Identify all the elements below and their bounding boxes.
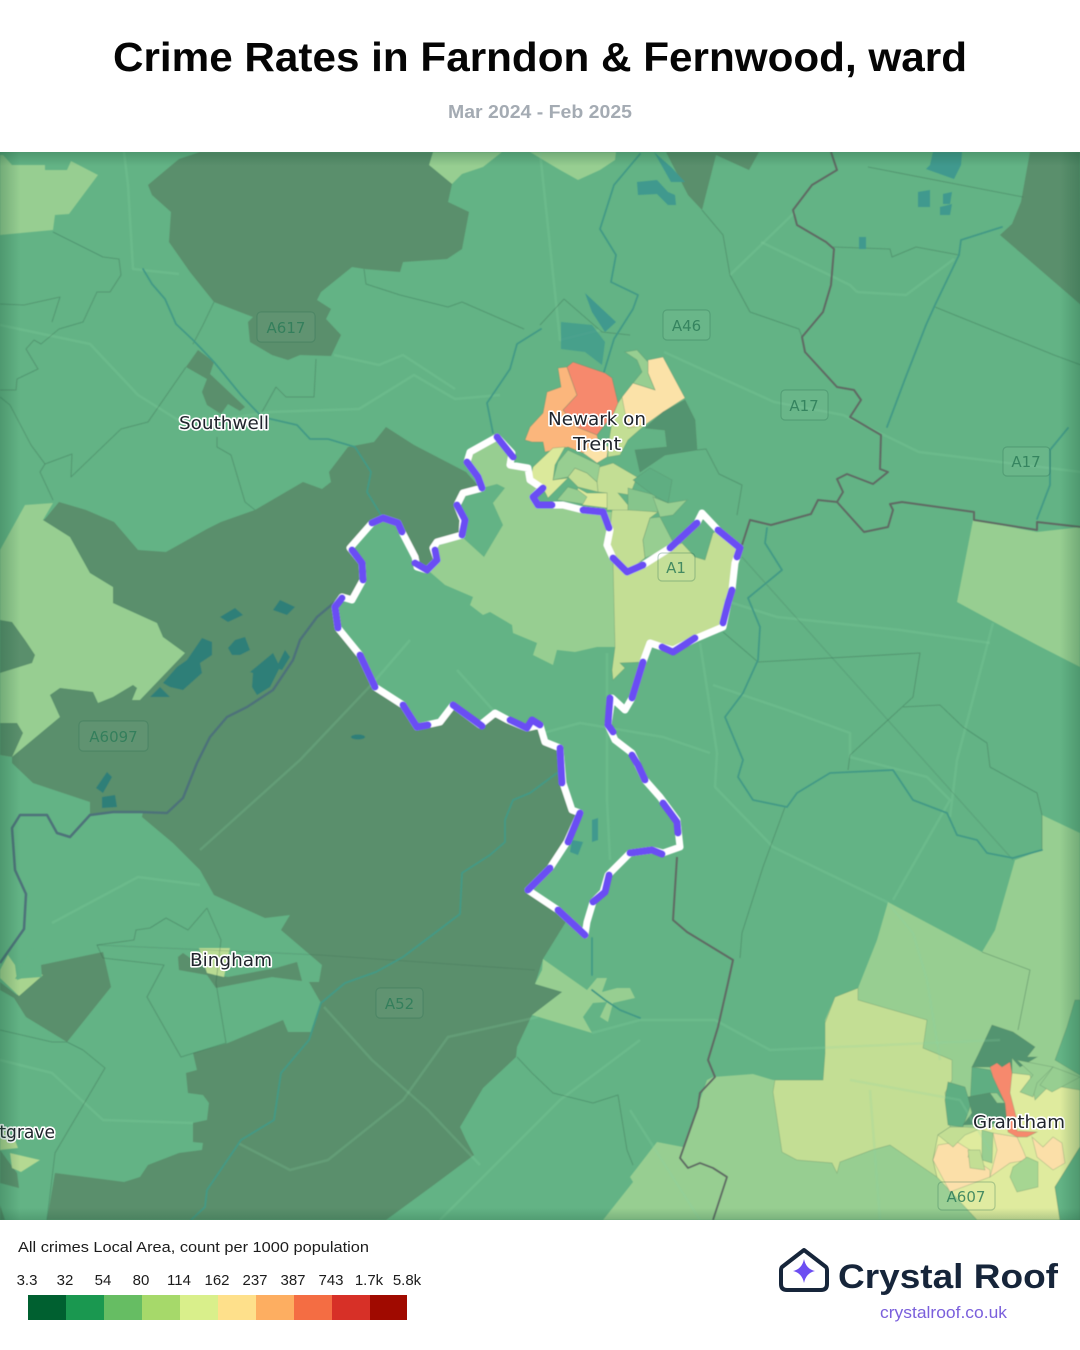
place labels xyxy=(0,409,1065,1143)
shield: A17 north: A17 xyxy=(789,397,819,415)
label: Newark on Trent xyxy=(548,409,646,455)
shield: A1: A1 xyxy=(666,559,686,577)
shield: A52 xyxy=(376,988,423,1018)
shield: A1 xyxy=(658,553,695,581)
subtitle: date range: Mar 2024 - Feb 2025 xyxy=(448,101,632,122)
legend scale labels xyxy=(17,1272,422,1289)
label: Southwell: Southwell xyxy=(179,413,269,434)
legend scale labels: 54 xyxy=(95,1272,111,1289)
light green inner areas xyxy=(1010,1157,1038,1192)
cream areas xyxy=(622,357,685,428)
river Trent northern reach xyxy=(600,154,640,372)
shield: A607 xyxy=(938,1182,995,1210)
shield: A6097: A6097 xyxy=(89,728,138,746)
Bingham and Cotgrave small areas xyxy=(0,948,230,1172)
shield: A17 east xyxy=(1003,447,1050,476)
small yellow-green sliver xyxy=(608,397,645,457)
ward-interior yellow-green xyxy=(568,463,740,680)
wordmark: Crystal Roof xyxy=(838,1258,1059,1296)
choropleth map xyxy=(0,152,1080,1220)
red strip xyxy=(990,1062,1037,1137)
road network xyxy=(48,214,1000,1171)
dark low-crime west block xyxy=(963,1093,1008,1125)
legend scale labels: 114 xyxy=(167,1272,191,1289)
white outline xyxy=(335,437,740,935)
Grantham high-crime areas xyxy=(773,988,1080,1220)
dark low-crime block east xyxy=(635,400,697,472)
river Trent wide western reach xyxy=(0,602,335,963)
river through southern dark area xyxy=(191,773,557,1220)
lakes xyxy=(96,152,962,855)
legend scale labels: 1.7k xyxy=(355,1272,384,1289)
shield: A617: A617 xyxy=(267,319,305,337)
highest-rank low-crime dark green areas xyxy=(0,152,1080,1220)
icon: house with star xyxy=(781,1250,827,1290)
cream areas xyxy=(933,1142,990,1192)
shield: A617 xyxy=(257,312,315,342)
legend colour ramp xyxy=(28,1295,407,1320)
legend scale labels: 743 xyxy=(318,1272,344,1289)
purple dashes xyxy=(335,437,740,935)
light green lobe xyxy=(625,350,655,390)
Newark on Trent high-crime areas xyxy=(525,350,740,680)
shield: A17 east: A17 xyxy=(1011,453,1041,471)
shield: A6097 xyxy=(79,721,148,751)
legend scale labels: 237 xyxy=(242,1272,268,1289)
shield: A52: A52 xyxy=(385,995,414,1013)
thin area boundaries xyxy=(0,167,1080,1220)
mid green west block xyxy=(945,1067,1005,1127)
label: Newark on Trent: Trent xyxy=(572,434,621,455)
teal edge areas xyxy=(1055,1000,1080,1075)
title: Crime Rates in Farndon & Fernwood, ward xyxy=(113,34,967,80)
light green mosaic xyxy=(553,450,600,482)
label: Grantham: Grantham xyxy=(973,1112,1065,1133)
legend scale labels: 162 xyxy=(204,1272,230,1289)
legend scale labels: 5.8k xyxy=(393,1272,422,1289)
legend title: All crimes Local Area, count per 1000 population xyxy=(18,1239,369,1256)
rivers xyxy=(0,154,1068,1220)
logo: Crystal Roof xyxy=(781,1250,1059,1322)
darker base notch beside ward xyxy=(457,484,505,557)
map edge vignette xyxy=(0,152,1080,1220)
shield: A607: A607 xyxy=(947,1188,985,1206)
dark low-crime north block xyxy=(972,1024,1038,1072)
legend scale labels: 80 xyxy=(133,1272,149,1289)
pale yellow areas xyxy=(530,447,568,498)
red area xyxy=(563,362,618,435)
shield: A46: A46 xyxy=(672,317,701,335)
pale yellow town base xyxy=(933,1073,1080,1220)
shield: A17 north xyxy=(781,390,828,420)
label: Newark on Trent: Newark on xyxy=(548,409,646,430)
orange area xyxy=(525,367,600,453)
legend scale labels: 32 xyxy=(57,1272,73,1289)
county boundary lines xyxy=(673,152,1080,1220)
legend scale labels: 3.3 xyxy=(17,1272,37,1289)
legend scale labels: 387 xyxy=(280,1272,306,1289)
map layers xyxy=(0,152,1080,1220)
ward boundary: Farndon & Fernwood xyxy=(335,437,740,935)
road shields xyxy=(79,310,1050,1210)
shield: A46 xyxy=(663,310,710,340)
large yellow-green area xyxy=(773,988,952,1177)
legend xyxy=(17,1239,422,1320)
lower-crime light green areas xyxy=(0,152,1080,1220)
website: crystalroof.co.uk xyxy=(880,1304,1008,1322)
label: Bingham: Bingham xyxy=(190,950,272,971)
